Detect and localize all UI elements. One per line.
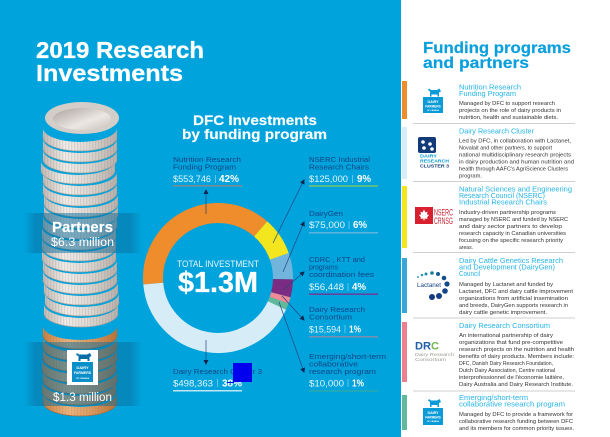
label: Emerging/short-term collaborative research program: collaborative (309, 360, 358, 368)
icon: DRC logo: Dairy Research (415, 352, 455, 357)
icon: DFC logo: FARMERS (425, 104, 441, 108)
icon: DFC logo: DAIRY (427, 100, 439, 104)
chart heading: DFC Investments (193, 113, 317, 128)
band: Dairy Farmers of Canada (24, 342, 142, 406)
program: NSERC Industrial Research Chairs: and dairy sector partners to develop (459, 224, 563, 230)
icon: Lactanet logo (417, 271, 450, 300)
program: NSERC Industrial Research Chairs: research capacity in Canadian universities (459, 231, 566, 237)
program: Emerging/short-term collaborative research program: collaborative research program (459, 400, 565, 408)
program: NSERC Industrial Research Chairs (402, 186, 572, 251)
program: Dairy Cattle Genetics Research and Development: Managed by Lactanet and funded by (459, 282, 553, 288)
icon: NSERC logo (415, 207, 453, 227)
program: NSERC Industrial Research Chairs: Research Council (NSERC) (459, 192, 545, 200)
heading: funding programs and partners (423, 40, 571, 72)
icon: DFC logo (67, 350, 98, 385)
program: Dairy Cattle Genetics Research and Development (402, 257, 573, 316)
program: Nutrition Research Funding Program (402, 81, 561, 121)
program: Dairy Research Consortium: interprofessionnel de l'économie laitière, (459, 375, 564, 381)
title: 2019 Research (36, 37, 204, 63)
coin stack (41, 102, 119, 416)
program: Dairy Cattle Genetics Research and Development: Dairy Cattle Genetics Research (459, 257, 563, 265)
white side panel (401, 0, 610, 437)
arrows (206, 180, 304, 372)
label: Dairy Research Consortium: Consortium (309, 312, 352, 322)
program: Emerging/short-term collaborative research program: Emerging/short-term (459, 394, 528, 402)
label: NSERC Industrial Research Chairs: NSERC Industrial (309, 155, 370, 164)
label: DairyGen: $75,000 (309, 220, 345, 231)
icon: DRC logo: Consortium (415, 357, 446, 362)
program: Dairy Research Consortium: benefits of dairy products. Members include: (459, 354, 574, 360)
program: Dairy Research Cluster: program. (459, 174, 482, 180)
label: Dairy Research Consortium: Dairy Research (309, 305, 365, 314)
icon: DFC logo (423, 399, 443, 425)
icon: DFC logo: FARMERS (425, 416, 441, 420)
program: Dairy Cattle Genetics Research and Development: and Development (DairyGen) (459, 264, 555, 272)
label: NSERC Industrial Research Chairs: Research Chairs (309, 162, 369, 172)
chart heading: by funding program (182, 127, 327, 142)
program: NSERC Industrial Research Chairs: Industry-driven partnership programs (459, 210, 556, 216)
icon: Lactanet logo: Lactanet (417, 283, 441, 289)
program: Dairy Research Cluster: in dairy production and human nutrition and (459, 160, 574, 166)
icon: DFC logo: DAIRY (76, 365, 89, 370)
blue square artifact (227, 363, 252, 383)
program: Dairy Cattle Genetics Research and Development: Lactanet, DFC and dairy cattle improvement (459, 289, 573, 295)
label: Dairy Research Consortium: 1% (349, 324, 361, 336)
label: Nutrition Research Funding Program: Funding Program (173, 162, 236, 172)
heading: funding programs and partners: and partners (423, 55, 529, 72)
label: Dairy Research Cluster 3: $498,363 (173, 378, 213, 390)
label: CDRC, KTT and programs coordination fees: 4% (352, 282, 366, 293)
icon: DRC logo: DRC (415, 340, 439, 352)
donut centre total: TOTAL INVESTMENT (177, 259, 259, 269)
label: Nutrition Research Funding Program: 42% (219, 174, 239, 185)
program: Dairy Research Consortium: Dairy Research Consortium (459, 322, 550, 330)
icon: DFC logo: FARMERS (74, 371, 92, 375)
label: DairyGen: DairyGen (309, 209, 343, 218)
icon: Dairy Research Cluster 3 logo: CLUSTER 3 (420, 164, 450, 169)
label: Emerging/short-term collaborative research program: Emerging/short-term (309, 352, 386, 361)
program: Dairy Research Consortium: Dutch Dairy Association, Centre national (459, 368, 555, 374)
icon: DFC logo: OF CANADA (427, 420, 440, 423)
chart heading (182, 113, 327, 142)
program: Nutrition Research Funding Program: Funding Program (459, 90, 516, 98)
icon: Dairy Research Cluster 3 logo (418, 137, 450, 169)
program: Dairy Research Consortium: research projects on the nutrition and health (459, 347, 574, 353)
icon: Dairy Research Cluster 3 logo: RESEARCH (420, 159, 449, 164)
program: Emerging/short-term collaborative research program: collaborative research funding between DFC (459, 419, 574, 425)
band: Dairy Farmers of Canada: $1.3 million (53, 392, 112, 404)
heading: funding programs and partners: Funding programs (423, 40, 571, 57)
icon: DRC logo (415, 340, 455, 362)
label: NSERC Industrial Research Chairs: $125,000 (309, 174, 348, 185)
label: Nutrition Research Funding Program: Nutrition Research (173, 155, 241, 164)
program: Dairy Research Consortium: organizations that fund pre-competitive (459, 340, 564, 346)
icon: NSERC logo: NSERC (434, 208, 453, 218)
program: Dairy Research Cluster: Novalait and other partners, to support (459, 146, 552, 152)
label: NSERC Industrial Research Chairs: 9% (357, 174, 371, 185)
label: Emerging/short-term collaborative research program (309, 352, 386, 392)
label: Emerging/short-term collaborative research program: research program (309, 367, 376, 376)
program: Dairy Cattle Genetics Research and Development: organizations from artificial insemination (459, 296, 568, 302)
program: Dairy Cattle Genetics Research and Development: dairy cattle genetic improvement. (459, 310, 547, 316)
program: Dairy Research Cluster: health through AAFC's AgriScience Clusters (459, 166, 568, 172)
program: Nutrition Research Funding Program: Nutrition Research (459, 84, 521, 92)
band: partners (24, 213, 142, 253)
program: Dairy Research Consortium: An international partnership of dairy (459, 333, 553, 339)
program: Dairy Cattle Genetics Research and Development: and breeds, DairyGen supports research in (459, 303, 568, 309)
label: CDRC, KTT and programs coordination fees: CDRC , KTT and (309, 255, 365, 264)
label: Nutrition Research Funding Program (173, 155, 242, 186)
program: NSERC Industrial Research Chairs: Natural Sciences and Engineering (459, 186, 572, 194)
label: CDRC, KTT and programs coordination fees: programs (309, 262, 338, 272)
label: Dairy Research Consortium: $15,594 (309, 324, 342, 336)
band: partners: Partners (52, 220, 113, 236)
label: NSERC Industrial Research Chairs (309, 155, 378, 186)
program: NSERC Industrial Research Chairs: Industrial Research Chairs (459, 198, 547, 206)
donut centre total: $1.3M (178, 267, 258, 299)
label: CDRC, KTT and programs coordination fees (309, 255, 378, 295)
program: Dairy Research Cluster: Dairy Research Cluster (459, 128, 535, 136)
label: Dairy Research Consortium (309, 305, 378, 338)
program: Nutrition Research Funding Program: nutrition, health and sustainable diets. (459, 115, 558, 121)
background panel (0, 0, 401, 437)
program: Nutrition Research Funding Program: projects on the role of dairy products in (459, 108, 561, 114)
program: NSERC Industrial Research Chairs: focusing on the specific research priority (459, 238, 563, 244)
program: Nutrition Research Funding Program: Managed by DFC to support research (459, 101, 555, 107)
label: Dairy Research Cluster 3: Dairy Research Cluster 3 (173, 367, 262, 376)
program: Emerging/short-term collaborative research program (402, 394, 574, 432)
program: Emerging/short-term collaborative research program: Managed by DFC to provide a framework for (459, 412, 573, 418)
label: CDRC, KTT and programs coordination fees: coordination fees (309, 270, 374, 279)
program: NSERC Industrial Research Chairs: areas. (459, 245, 473, 251)
program: NSERC Industrial Research Chairs: managed by NSERC and funded by NSERC (459, 217, 569, 223)
icon: DFC logo: DAIRY (427, 411, 439, 415)
icon: DFC logo (423, 88, 443, 113)
program: Dairy Research Cluster: Led by DFC, in collaboration with Lactanet, (459, 138, 571, 144)
program: Dairy Research Consortium: Dairy Australia and Dairy Research Institute. (459, 382, 573, 388)
label: Nutrition Research Funding Program: $553,746 (173, 174, 211, 185)
program: Emerging/short-term collaborative research program: and its members for common priority issues. (459, 426, 574, 432)
band: partners: $6.3 million (51, 237, 114, 249)
program: Dairy Research Cluster (402, 127, 574, 180)
icon: NSERC logo: CRNSG (434, 216, 453, 227)
icon: DFC logo: OF CANADA (427, 109, 440, 112)
donut chart (153, 213, 283, 343)
program: Dairy Research Consortium: DFC, Danish Dairy Research Foundation, (459, 361, 553, 367)
icon: Dairy Research Cluster 3 logo: DAIRY (420, 154, 437, 159)
label: Dairy Research Cluster 3: 38% (222, 378, 242, 390)
label: CDRC, KTT and programs coordination fees: $56,448 (309, 282, 344, 293)
label: Emerging/short-term collaborative research program: $10,000 (309, 378, 344, 390)
label: Emerging/short-term collaborative research program: 1% (352, 378, 364, 390)
program: Dairy Research Consortium (402, 322, 574, 388)
label: Dairy Research Cluster 3 (173, 367, 262, 392)
program: Dairy Research Cluster: national multidisciplinary research projects (459, 152, 571, 158)
label: DairyGen: 6% (353, 220, 367, 231)
title (36, 37, 204, 86)
icon: DFC logo: OF CANADA (76, 377, 89, 380)
title: Investments (36, 60, 183, 86)
label: DairyGen (309, 209, 378, 234)
program: Dairy Cattle Genetics Research and Development: Council (459, 270, 480, 278)
